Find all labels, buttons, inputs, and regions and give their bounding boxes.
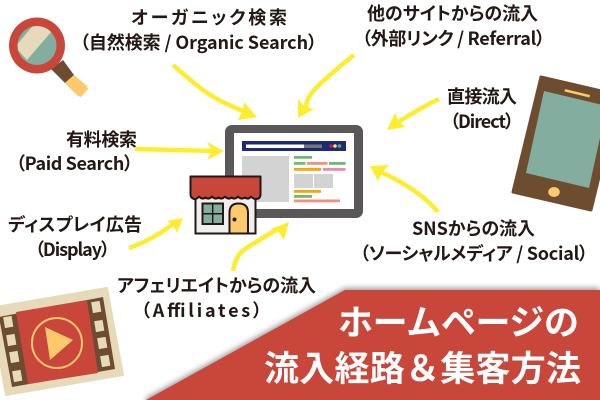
label: referral: 他のサイトからの流入	[367, 0, 538, 26]
arrow: affiliates to store	[233, 222, 289, 271]
label: SNS: （ソーシャルメディア / Social）	[360, 240, 588, 266]
title text	[264, 295, 581, 392]
label: referral	[362, 0, 545, 51]
label: paid search: 有料検索	[66, 126, 137, 152]
label: referral: （外部リンク / Referral）	[362, 25, 545, 51]
labels	[8, 0, 588, 323]
label: SNS	[360, 215, 588, 266]
label: direct: 直接流入	[447, 83, 517, 109]
title text: 流入経路＆集客方法	[264, 341, 581, 392]
arrow: organic search to site	[173, 65, 257, 120]
arrow: direct to site	[387, 99, 439, 130]
title text: ホームページの	[338, 295, 579, 346]
arrow: SNS to site	[370, 165, 438, 212]
label: display: ディスプレイ広告	[8, 211, 142, 237]
title banner	[146, 288, 600, 400]
label: paid search: （Paid Search）	[16, 150, 133, 176]
icon: video film	[0, 288, 123, 395]
label: affiliates: （Affiliates）	[141, 297, 262, 323]
label: organic search: オーガニック検索	[131, 4, 287, 30]
label: affiliates: アフェリエイトからの流入	[117, 272, 316, 298]
label: affiliates	[117, 272, 316, 323]
label: organic search: （自然検索 / Organic Search）	[80, 29, 317, 55]
icon: smartphone	[513, 77, 600, 210]
label: direct: （Direct）	[450, 108, 514, 134]
icon: storefront house	[190, 176, 260, 234]
label: direct	[447, 83, 517, 134]
arrow: referral to site	[298, 55, 354, 118]
label: display: （Display）	[35, 236, 110, 262]
website tablet illustration	[225, 125, 363, 218]
label: paid search	[16, 126, 137, 176]
label: SNS: SNSからの流入	[412, 215, 535, 241]
arrow: paid search to site	[135, 142, 224, 160]
arrow: display to store	[129, 218, 183, 248]
icon: magnifying glass	[9, 18, 88, 97]
label: organic search	[80, 4, 317, 55]
label: display	[8, 211, 142, 262]
